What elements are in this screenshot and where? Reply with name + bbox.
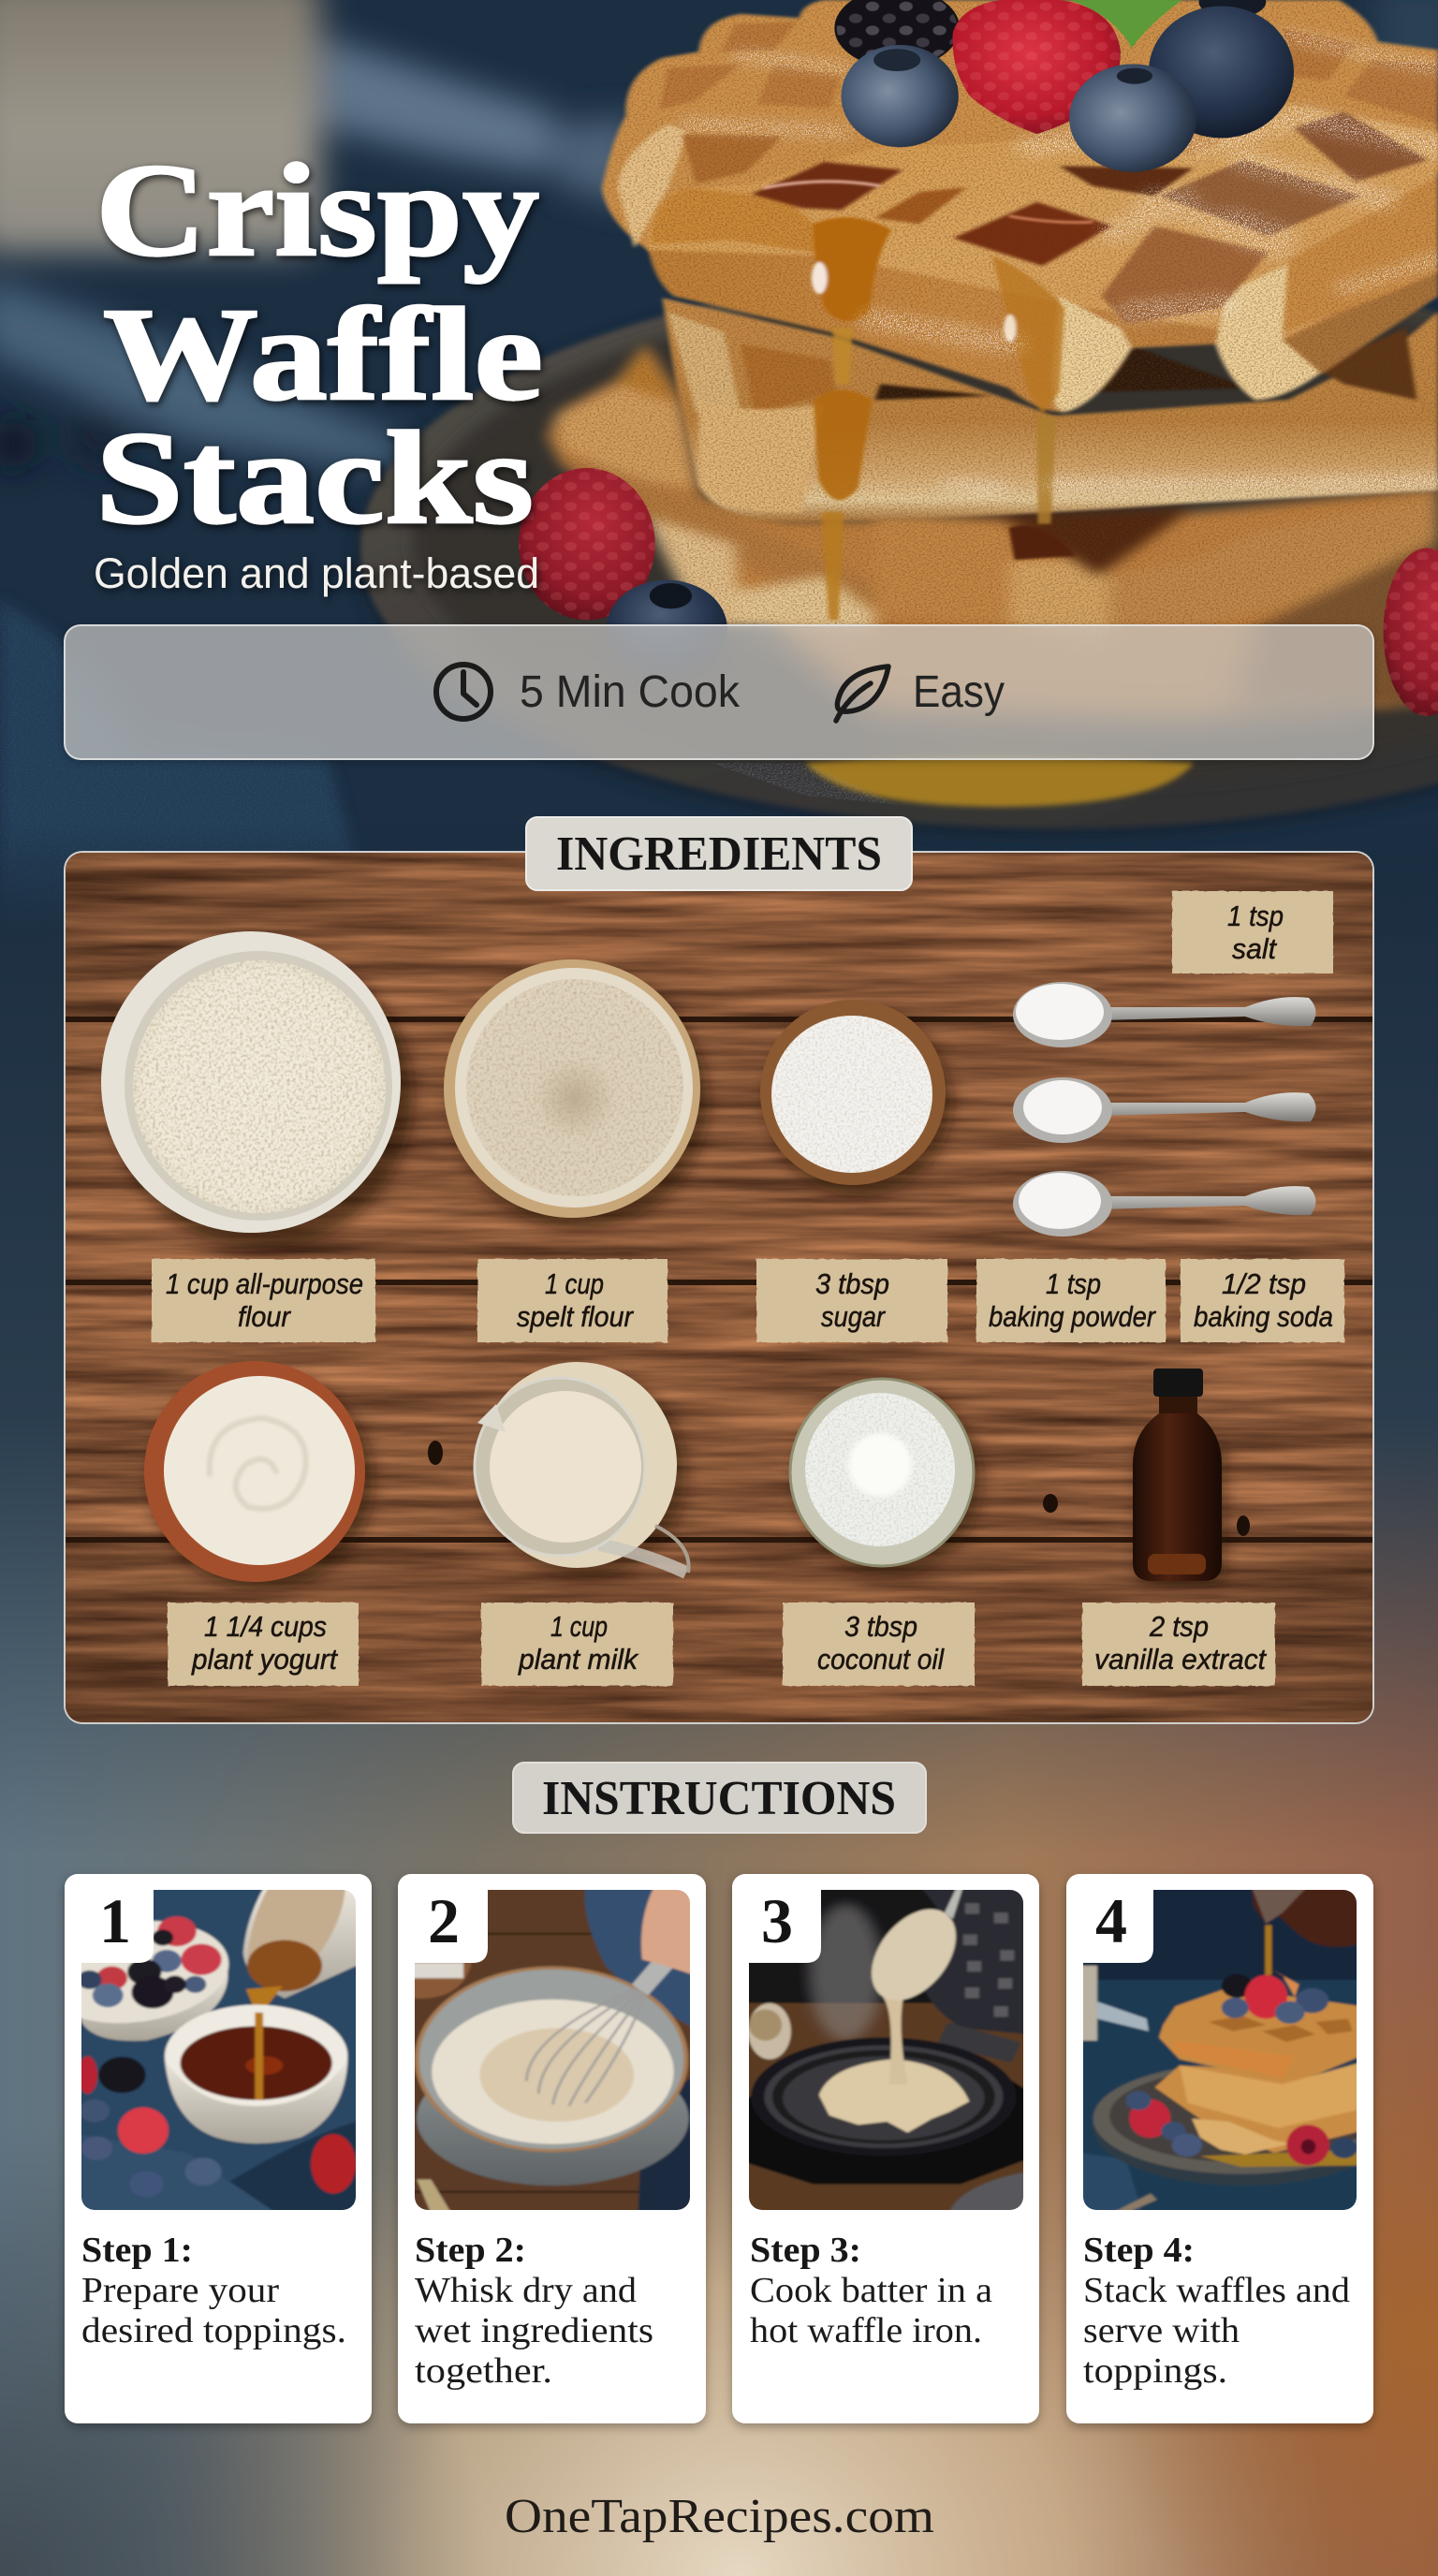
photo: whisking batter bbox=[411, 1887, 694, 2213]
jar: coconut oil bbox=[790, 1379, 983, 1576]
label: 1 tsp salt bbox=[1172, 891, 1333, 973]
label: sugar: 3 tbsp bbox=[815, 1267, 889, 1300]
blueberry left bbox=[842, 45, 959, 147]
label: all-purpose flour: flour bbox=[238, 1300, 292, 1333]
label: vanilla extract bbox=[1082, 1603, 1275, 1686]
label: coconut oil: coconut oil bbox=[817, 1643, 945, 1676]
difficulty: Easy bbox=[913, 667, 1005, 717]
label: baking soda: 1/2 tsp bbox=[1222, 1267, 1306, 1300]
photo: cooking in waffle iron bbox=[745, 1887, 1027, 2213]
hero photo: waffle stack on plate bbox=[0, 0, 1438, 906]
plate bbox=[356, 267, 1438, 839]
subtitle: Golden and plant-based bbox=[94, 549, 539, 597]
heading: ingredients: INGREDIENTS bbox=[556, 827, 882, 881]
step text bbox=[81, 2231, 346, 2350]
step text: toppings. bbox=[1083, 2351, 1227, 2391]
label: plant yogurt: 1 1/4 cups bbox=[204, 1610, 327, 1643]
label: baking powder: baking powder bbox=[989, 1300, 1156, 1333]
footer website: OneTapRecipes.com bbox=[505, 2490, 934, 2543]
card: step 3 bbox=[732, 1874, 1039, 2423]
step text: hot waffle iron. bbox=[750, 2311, 982, 2350]
label: plant milk bbox=[481, 1603, 673, 1686]
powdered sugar bbox=[690, 36, 1438, 488]
heading: ingredients bbox=[526, 817, 912, 890]
waffle stack bbox=[519, 0, 1438, 720]
number tab bbox=[1078, 1885, 1153, 1963]
blueberry lower bbox=[607, 580, 727, 676]
middle waffle bbox=[662, 298, 1438, 522]
title: Crispy bbox=[95, 136, 539, 284]
step text: Step 2: bbox=[415, 2231, 526, 2270]
label: 1 tsp salt: salt bbox=[1232, 932, 1277, 965]
blueberry large bbox=[1149, 6, 1294, 138]
number tab bbox=[410, 1885, 488, 1963]
card: step 4 bbox=[1066, 1874, 1394, 2423]
label: sugar bbox=[756, 1259, 947, 1342]
step text: Step 3: bbox=[750, 2231, 861, 2270]
label: spelt flour: 1 cup bbox=[545, 1267, 604, 1300]
heading: instructions: INSTRUCTIONS bbox=[542, 1772, 896, 1825]
spoon: baking powder bbox=[1013, 1077, 1316, 1143]
front waffle bbox=[648, 104, 1438, 412]
label: spelt flour bbox=[477, 1259, 668, 1342]
bowl: all-purpose flour bbox=[101, 931, 414, 1249]
dark blueberry top bbox=[1199, 0, 1266, 18]
step text bbox=[750, 2231, 992, 2350]
number tab: 1 bbox=[99, 1885, 131, 1956]
label: baking powder: 1 tsp bbox=[1046, 1267, 1101, 1300]
label: vanilla extract: 2 tsp bbox=[1149, 1610, 1209, 1643]
label: plant milk: plant milk bbox=[518, 1643, 638, 1676]
number tab bbox=[77, 1885, 154, 1963]
label: coconut oil bbox=[783, 1603, 975, 1686]
bowl: sugar bbox=[760, 1000, 953, 1196]
number tab: 4 bbox=[1095, 1885, 1127, 1956]
spoon: baking soda bbox=[1013, 1171, 1316, 1237]
icon: leaf bbox=[836, 666, 888, 721]
label: coconut oil: 3 tbsp bbox=[844, 1610, 917, 1643]
photo: finished waffle stack bbox=[1079, 1887, 1394, 2213]
step text: Cook batter in a bbox=[750, 2271, 992, 2310]
blueberry right bbox=[1069, 64, 1196, 172]
bottom waffle bbox=[548, 344, 1438, 720]
raspberry bbox=[953, 0, 1121, 134]
label: baking soda bbox=[1181, 1259, 1344, 1342]
step text: together. bbox=[415, 2351, 552, 2391]
label: all-purpose flour: 1 cup all-purpose bbox=[166, 1267, 363, 1300]
spoon: salt bbox=[1013, 982, 1316, 1047]
raspberry right bbox=[1384, 548, 1438, 716]
number tab: 2 bbox=[428, 1885, 460, 1956]
bottle: vanilla extract bbox=[1133, 1368, 1226, 1587]
heading: instructions bbox=[513, 1763, 926, 1833]
raspberry lower-left bbox=[519, 468, 655, 620]
step text: Whisk dry and bbox=[415, 2271, 637, 2310]
step text bbox=[1083, 2231, 1350, 2391]
label: plant milk: 1 cup bbox=[550, 1610, 608, 1643]
wooden board bbox=[66, 853, 1372, 1722]
step text: Step 4: bbox=[1083, 2231, 1195, 2270]
cook time: 5 Min Cook bbox=[520, 667, 741, 717]
number tab bbox=[744, 1885, 821, 1963]
blackberry bbox=[834, 0, 959, 60]
jug: plant milk bbox=[475, 1362, 689, 1579]
step text: Stack waffles and bbox=[1083, 2271, 1350, 2310]
label: plant yogurt: plant yogurt bbox=[191, 1643, 338, 1676]
label: sugar: sugar bbox=[821, 1300, 886, 1333]
leaf bbox=[1070, 0, 1182, 48]
photo: pouring syrup bbox=[27, 1887, 360, 2213]
label: spelt flour: spelt flour bbox=[517, 1300, 635, 1333]
label: plant yogurt bbox=[168, 1603, 359, 1686]
label: all-purpose flour bbox=[152, 1259, 375, 1342]
card: step 1 bbox=[27, 1874, 372, 2423]
info bar: cook time and difficulty bbox=[64, 624, 1374, 760]
number tab: 3 bbox=[761, 1885, 793, 1956]
step text: wet ingredients bbox=[415, 2311, 653, 2350]
step text: desired toppings. bbox=[81, 2311, 346, 2350]
label: 1 tsp salt: 1 tsp bbox=[1227, 900, 1284, 932]
label: baking soda: baking soda bbox=[1194, 1300, 1333, 1333]
icon: clock bbox=[436, 665, 491, 719]
title: Waffle bbox=[103, 280, 543, 428]
label: baking powder bbox=[976, 1259, 1166, 1342]
bowl: spelt flour bbox=[444, 959, 710, 1230]
title: Stacks bbox=[95, 403, 534, 551]
step text: serve with bbox=[1083, 2311, 1240, 2350]
step text: Step 1: bbox=[81, 2231, 193, 2270]
label: vanilla extract: vanilla extract bbox=[1094, 1643, 1267, 1676]
panel: ingredients bbox=[64, 851, 1374, 1724]
syrup drips bbox=[763, 182, 1093, 620]
step text: Prepare your bbox=[81, 2271, 279, 2310]
title bbox=[95, 136, 543, 551]
bowl: plant yogurt bbox=[144, 1361, 374, 1591]
step text bbox=[415, 2231, 653, 2391]
back waffle bbox=[602, 0, 1438, 256]
card: step 2 bbox=[398, 1874, 706, 2423]
